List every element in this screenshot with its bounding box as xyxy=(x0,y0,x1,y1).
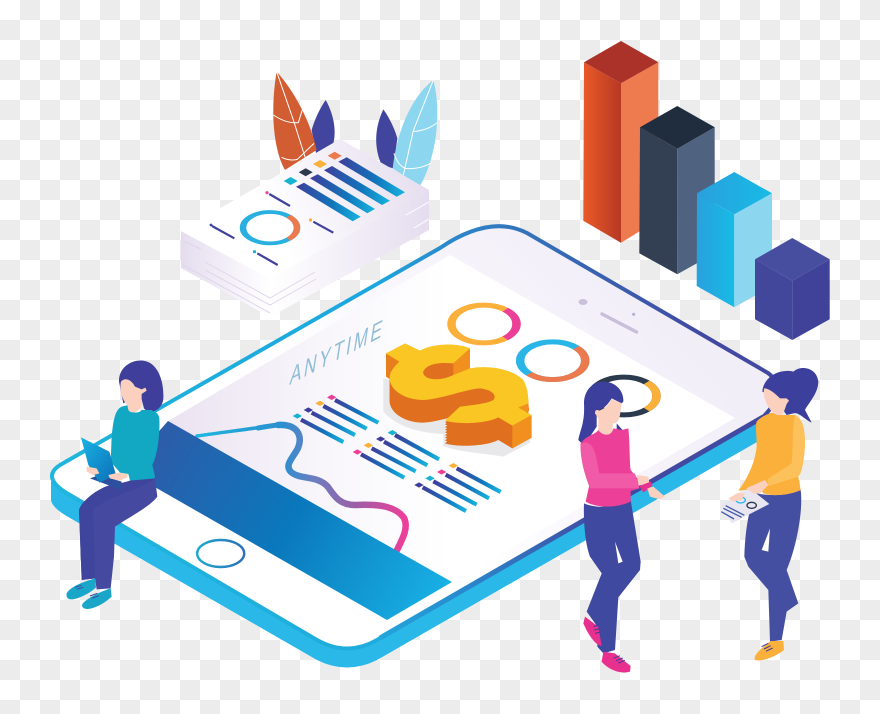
report small labels xyxy=(210,191,333,265)
figure: standing woman in pink xyxy=(578,382,665,673)
speaker slot xyxy=(602,314,636,332)
sensor dot xyxy=(632,313,635,316)
home button xyxy=(197,540,244,567)
report stripes xyxy=(284,152,405,221)
screen xyxy=(168,255,735,620)
stripes group 2 xyxy=(353,430,439,478)
report donut chart xyxy=(232,206,308,250)
tablet xyxy=(51,226,778,668)
leaves behind the report xyxy=(273,72,437,186)
report stack body xyxy=(181,139,429,317)
figure: standing woman in yellow with report xyxy=(721,368,818,660)
bar: indigo xyxy=(755,238,830,340)
bar: sky blue xyxy=(697,172,772,307)
stripes group 3 xyxy=(414,463,501,511)
lower right tablet edge xyxy=(380,417,763,638)
ring: dark and orange xyxy=(578,369,670,423)
ring: orange and pink xyxy=(438,297,530,351)
wave line chart xyxy=(197,425,406,552)
bar: dark slate xyxy=(639,106,715,274)
3D bar chart xyxy=(583,41,830,340)
ring: blue and coral xyxy=(507,334,599,387)
camera dot xyxy=(578,299,588,305)
figure: seated woman with clipboard xyxy=(66,361,163,609)
stack of report sheets with leaves xyxy=(181,72,437,317)
blue screen band xyxy=(125,421,452,620)
tablet side xyxy=(51,373,775,668)
bar: orange xyxy=(583,41,658,243)
stripes group 1 xyxy=(293,395,378,442)
dollar sign xyxy=(383,343,532,457)
ANYTIME label: ANYTIME xyxy=(288,312,387,391)
tablet surface xyxy=(52,226,778,649)
